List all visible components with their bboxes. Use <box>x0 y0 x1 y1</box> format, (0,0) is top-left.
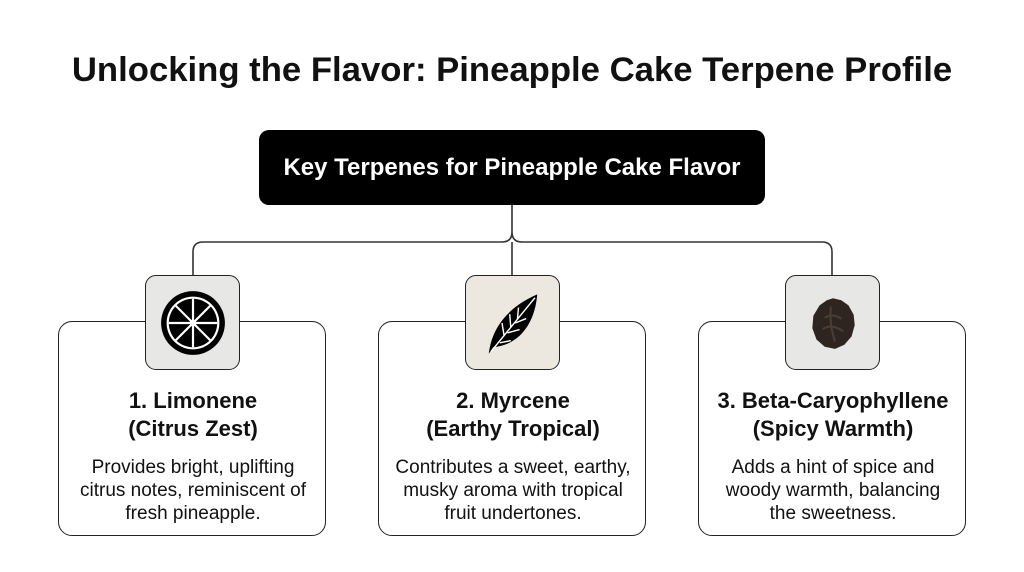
card: myrcene: fruit undertones. <box>444 503 582 524</box>
icon: citrus slice <box>145 275 240 370</box>
card: limonene: citrus notes, reminiscent of <box>80 480 306 501</box>
card: myrcene: (Earthy Tropical) <box>426 416 600 441</box>
card: beta-caryophyllene <box>698 321 966 536</box>
icon: leaf <box>465 275 560 370</box>
icon: peppercorn <box>785 275 880 370</box>
card: limonene: Provides bright, uplifting <box>92 457 294 478</box>
card: myrcene: musky aroma with tropical <box>403 480 623 501</box>
card: beta-caryophyllene: the sweetness. <box>770 503 896 524</box>
card: beta-caryophyllene: Adds a hint of spice and <box>732 457 934 478</box>
card: myrcene: Contributes a sweet, earthy, <box>395 457 631 478</box>
card: limonene: fresh pineapple. <box>125 503 261 524</box>
card: limonene: 1. Limonene <box>129 388 257 413</box>
header box <box>259 130 765 205</box>
card: limonene <box>58 321 326 536</box>
card: beta-caryophyllene: (Spicy Warmth) <box>753 416 913 441</box>
card: myrcene: 2. Myrcene <box>456 388 570 413</box>
title: Unlocking the Flavor: Pineapple Cake Terpene Profile <box>72 51 952 89</box>
card: limonene: (Citrus Zest) <box>128 416 258 441</box>
card: beta-caryophyllene: woody warmth, balancing <box>726 480 940 501</box>
header box: Key Terpenes for Pineapple Cake Flavor <box>283 154 741 180</box>
card: myrcene <box>378 321 646 536</box>
card: beta-caryophyllene: 3. Beta-Caryophyllene <box>717 388 949 413</box>
